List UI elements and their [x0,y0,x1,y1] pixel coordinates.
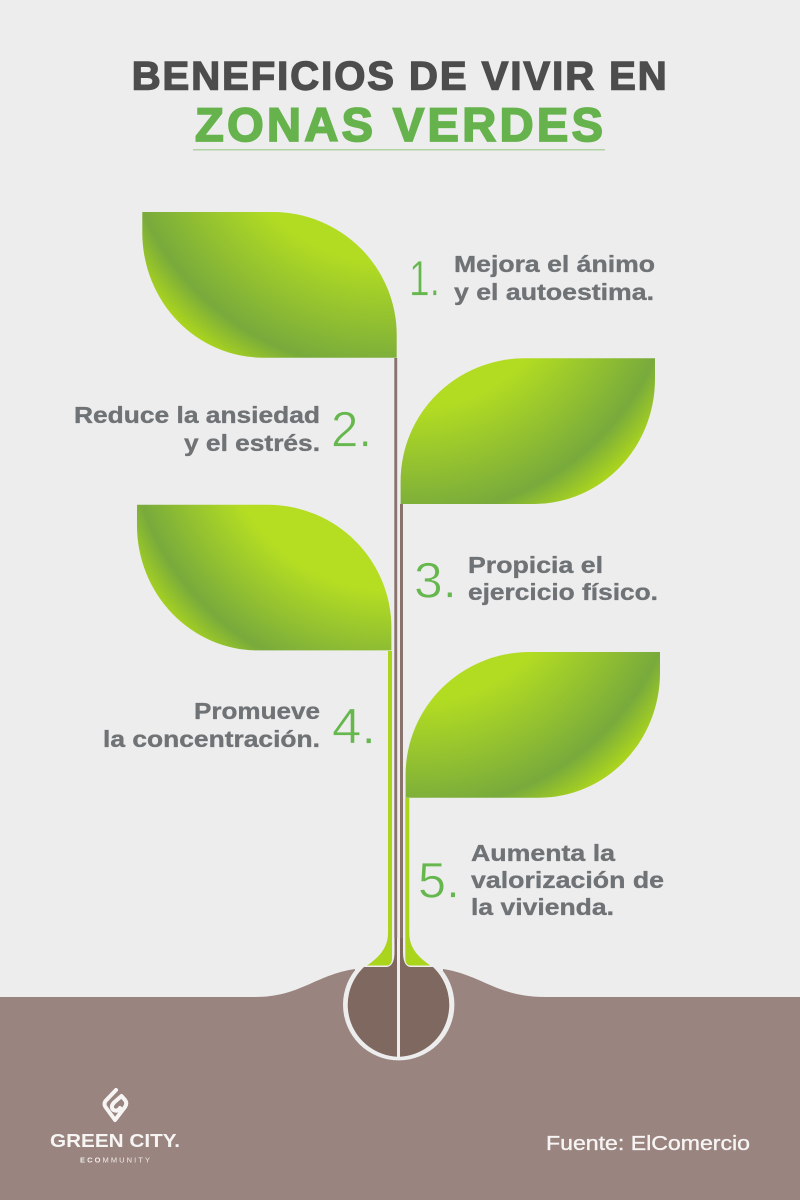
benefit 3 [414,552,658,608]
source: Fuente: ElComercio [546,1133,750,1155]
right green stem [405,798,430,966]
benefit 3: Propicia el [468,552,603,578]
benefit 4: la concentración. [103,726,320,752]
benefit 2 [74,401,372,457]
benefit 2: 2. [331,401,372,457]
benefit 3: 3. [414,552,457,608]
benefit 3: ejercicio físico. [468,579,658,605]
bulb outline [343,949,454,1060]
leaf 1 [142,212,397,358]
benefit 5: la vivienda. [471,894,614,920]
leaf 4 [406,652,660,798]
benefit 4: Promueve [194,698,320,724]
icon: leaf logo [104,1090,126,1120]
benefit 5 [418,840,664,920]
logo [50,1090,180,1164]
plant [137,212,660,1060]
right brown stem [400,504,403,938]
benefit 2: Reduce la ansiedad [74,402,320,428]
benefit 1 [409,250,655,306]
leaf 3 [137,505,391,650]
title line 1: BENEFICIOS DE VIVIR EN [132,54,667,98]
left brown stem [394,358,397,938]
title line 2: ZONAS VERDES [195,98,603,151]
leaf 2 [401,358,655,504]
brand tagline: ECO MMUNITY [80,1156,150,1164]
title [132,54,667,151]
root left half [348,930,397,1057]
benefit 5: Aumenta la [471,840,615,866]
title underline [193,149,605,150]
benefit 4 [103,698,376,754]
ground [0,969,800,1200]
root right half [400,930,449,1057]
benefit 5: 5. [418,852,460,908]
benefit 1: Mejora el ánimo [454,251,655,277]
benefit 4: 4. [332,698,376,754]
brand name: GREEN CITY. [50,1131,180,1151]
left green stem [367,651,392,966]
benefit 2: y el estrés. [184,430,320,456]
benefit 1: y el autoestima. [454,279,654,305]
benefit 1: 1. [409,250,440,306]
benefit 5: valorización de [471,867,664,893]
